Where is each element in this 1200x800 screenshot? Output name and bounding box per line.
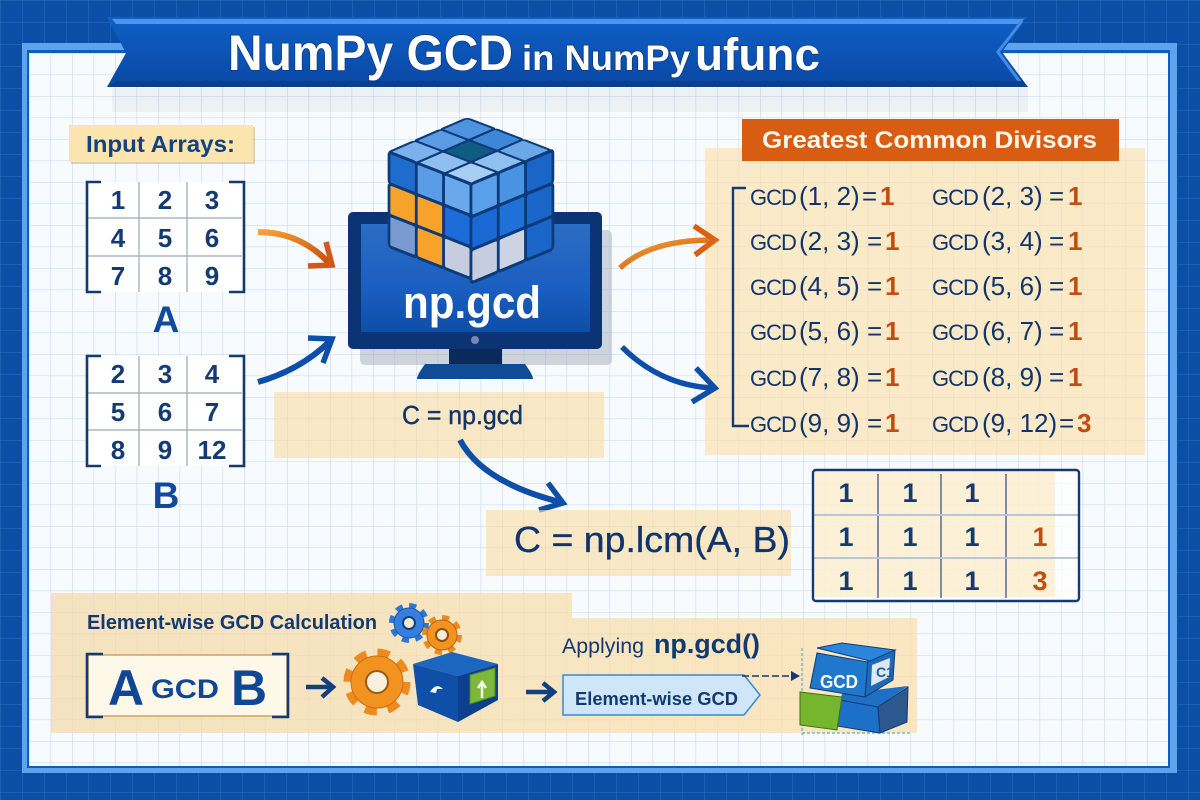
matrix A: 8 [158,261,172,291]
title text: ufunc [695,29,820,80]
result table: 1 [838,522,854,552]
icon: blue processing box [413,652,498,722]
GCD results: right column: (2, 3) [982,181,1043,211]
GCD results: left column: GCD [750,412,796,437]
GCD results: left column: = [862,181,877,211]
GCD results: right column: GCD [932,412,978,437]
matrix A: 1 [111,185,125,215]
result table: 1 [838,478,854,508]
GCD results: left column: 1 [885,408,899,438]
GCD results: left column: = [867,408,882,438]
GCD results: right column: 1 [1068,226,1082,256]
arrow [306,678,333,697]
arrow [526,683,554,701]
panel heading: Greatest Common Divisors [762,127,1097,154]
GCD results: left column: = [867,316,882,346]
monitor label: np.gcd [403,277,541,328]
GCD results: right column: = [1049,271,1064,301]
result table: 1 [964,566,980,596]
result table: 1 [1032,522,1048,552]
panel: greatest common divisors [705,119,1145,455]
matrix B: 2 [111,359,125,389]
GCD results: left column: 1 [885,362,899,392]
title text: in NumPy [522,39,691,78]
tag: element-wise GCD [563,675,760,715]
matrix B: 6 [158,397,172,427]
GCD results: right column: (5, 6) [982,271,1043,301]
title banner [107,17,1028,87]
formula: C = np.gcd [274,392,604,458]
icon: GCD box stack: GCD [820,672,858,692]
bracket [733,188,749,426]
matrix A label: A [153,299,179,340]
arrow: B to np.gcd [258,338,332,382]
panel heading: Element-wise GCD Calculation [87,612,377,634]
matrix A: 5 [158,223,172,253]
icon: large orange gear [348,653,406,711]
icon: GCD box stack: C1 [876,664,894,680]
GCD results: left column: (4, 5) [799,271,860,301]
icon: blue gear [392,606,426,640]
GCD results: left column: (5, 6) [799,316,860,346]
title text [228,25,820,81]
GCD results: left column: 1 [885,271,899,301]
A GCD B box: B [231,660,267,716]
ribbon shadow [112,88,1028,112]
GCD results: right column: 1 [1068,362,1082,392]
result table: 3 [1032,566,1048,596]
matrix B: 3 [158,359,172,389]
GCD results: left column: GCD [750,230,796,255]
A GCD B box: A [108,660,144,716]
matrix B: 12 [198,435,226,465]
step heading: Applying [562,635,644,658]
GCD results: right column: = [1049,181,1064,211]
GCD results: right column: GCD [932,230,978,255]
GCD results: right column: = [1049,226,1064,256]
result table: 1 [902,566,918,596]
result table: 1 [964,478,980,508]
GCD results: left column: = [867,271,882,301]
GCD results: left column: GCD [750,366,796,391]
arrow: np.gcd to results, blue [622,347,715,402]
GCD results: left column: GCD [750,320,796,345]
GCD results: right column: 1 [1068,316,1082,346]
formula: C = np.lcm(A, B) [486,510,791,576]
GCD results: left column: 1 [885,226,899,256]
GCD results: right column: GCD [932,320,978,345]
GCD results: left column: 1 [885,316,899,346]
matrix B: 4 [205,359,220,389]
matrix B: 5 [111,397,125,427]
GCD results: left column: GCD [750,185,796,210]
arrow: A to np.gcd [258,232,332,266]
GCD results: right column: (8, 9) [982,362,1043,392]
label: input arrays: Input Arrays: [86,131,235,157]
GCD results: right column: (6, 7) [982,316,1043,346]
A GCD B box [87,654,288,717]
matrix A: 2 [158,185,172,215]
GCD results: right column: (3, 4) [982,226,1043,256]
GCD results: left column: = [867,362,882,392]
arrow: np.gcd to results, orange [620,226,715,268]
result table: 1 [838,566,854,596]
GCD results: right column: 1 [1068,271,1082,301]
formula: C = np.lcm(A, B): C = np.lcm(A, B) [514,519,790,560]
step heading: np.gcd() [654,629,760,659]
matrix B [87,356,244,466]
GCD results: right column: = [1049,316,1064,346]
result table: 1 [902,522,918,552]
GCD results: left column: (9, 9) [799,408,860,438]
matrix B: 7 [205,397,219,427]
GCD results: left column: (2, 3) [799,226,860,256]
matrix B: 8 [111,435,125,465]
monitor with np.gcd [348,212,612,379]
GCD results: right column: = [1049,362,1064,392]
GCD results: left column [750,181,899,438]
result table: 1 [902,478,918,508]
dashed arrow [742,671,800,681]
arrow: np.gcd to np.lcm [460,440,563,510]
GCD results: left column: = [867,226,882,256]
label: input arrays [69,125,255,164]
icon: GCD box stack [800,643,912,735]
panel: element-wise GCD calculation [51,593,917,735]
panel heading [742,119,1119,161]
GCD results: right column: GCD [932,275,978,300]
GCD results: right column: 3 [1077,408,1091,438]
matrix A: 4 [111,223,126,253]
GCD results: right column: 1 [1068,181,1082,211]
title text: NumPy GCD [228,25,513,81]
GCD results: right column: (9, 12) [982,408,1057,438]
A GCD B box: GCD [151,674,219,704]
result table: 1 [964,522,980,552]
matrix A: 3 [205,185,219,215]
GCD results: left column: (1, 2) [799,181,860,211]
matrix A: 7 [111,261,125,291]
GCD results: right column: GCD [932,366,978,391]
icon: small orange gear [425,618,459,652]
matrix B label: B [153,475,179,516]
GCD results: left column: 1 [880,181,894,211]
matrix A: 6 [205,223,219,253]
result table [813,470,1079,602]
matrix A [87,182,244,292]
matrix A: 9 [205,261,219,291]
GCD results: left column: (7, 8) [799,362,860,392]
matrix B: 9 [158,435,172,465]
GCD results: right column: = [1059,408,1074,438]
tag: element-wise GCD: Element-wise GCD [575,688,738,709]
icon: data cube [389,118,553,283]
GCD results: right column: GCD [932,185,978,210]
GCD results: right column [932,181,1091,438]
GCD results: left column: GCD [750,275,796,300]
formula: C = np.gcd: C = np.gcd [402,400,523,430]
